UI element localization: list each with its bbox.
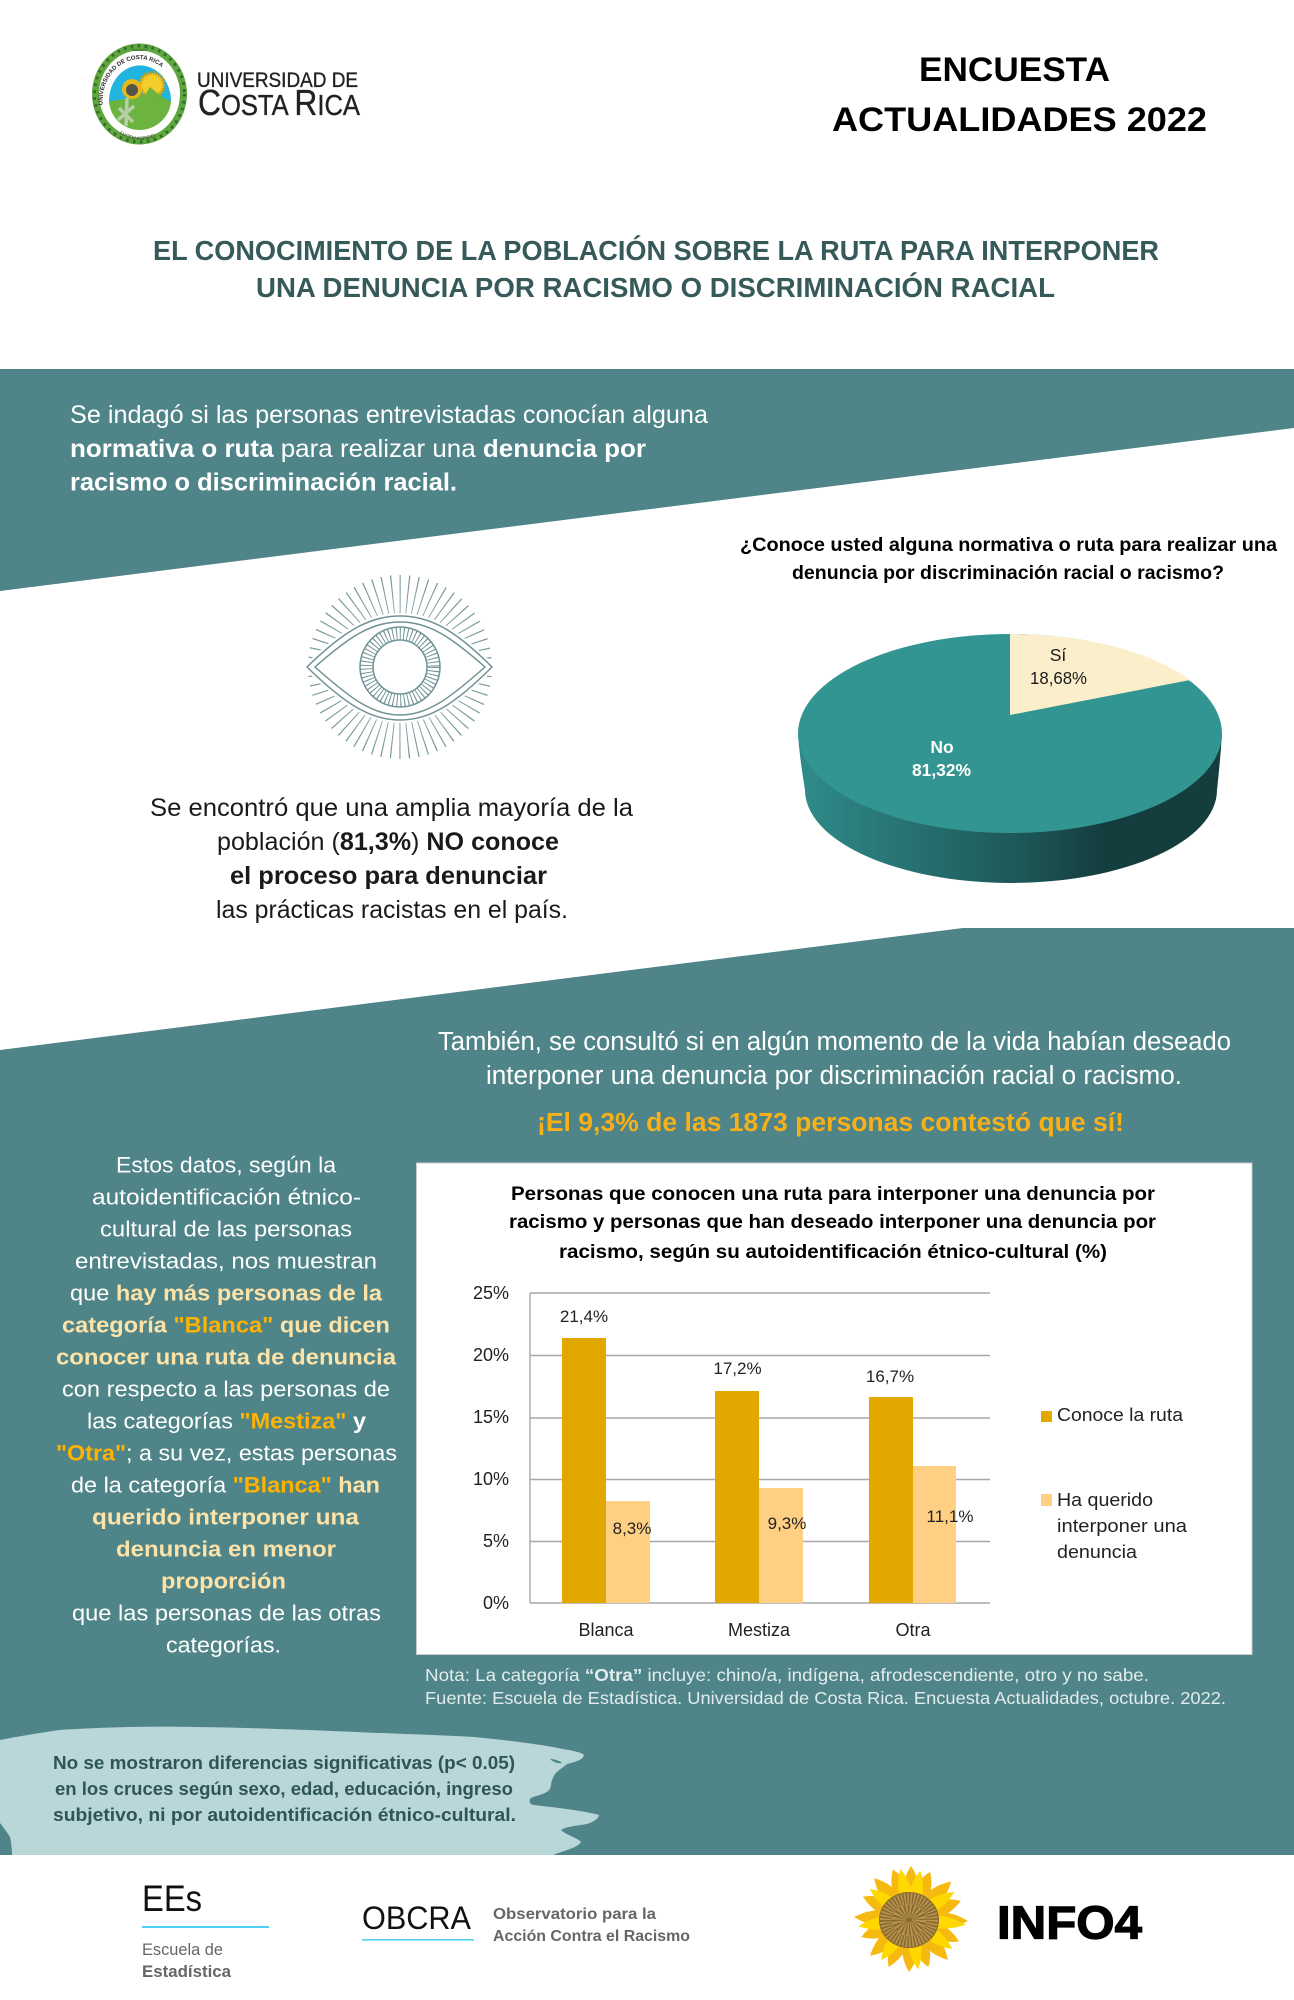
text block: left column explanation: que las personas de las otras [72,1600,381,1626]
text block: survey question intro: Se indagó si las personas entrevistadas conocían alguna [70,401,708,429]
text block: left column explanation: "Otra"; a su vez, estas personas [56,1440,397,1466]
bar chart title: racismo, según su autoidentificación étnico-cultural (%) [559,1241,1107,1263]
slice: Sí [1010,634,1190,715]
bars: Conoce la ruta [562,1338,913,1603]
category labels [578,1620,931,1640]
text block: main finding: Se encontró que una amplia mayoría de la [150,794,633,822]
text block: survey question intro: racismo o discriminación racial. [70,468,457,496]
text block: left column explanation [56,1152,397,1658]
bar chart title [509,1183,1156,1263]
logo: Escuela de Estadística: Estadística [142,1962,232,1981]
y axis labels [473,1283,509,1613]
text block: left column explanation: entrevistadas, nos muestran [75,1248,377,1274]
category labels: Otra [895,1620,931,1640]
y axis labels: 20% [473,1345,509,1365]
title: UNA DENUNCIA POR RACISMO O DISCRIMINACIÓN RACIAL [256,272,1055,303]
data labels: 17,2% [713,1359,762,1378]
logo: Escuela de Estadística [142,1878,269,1981]
text block: left column explanation: con respecto a las personas de [62,1376,390,1402]
survey heading [832,51,1207,139]
label: No: 81,32% [912,760,971,780]
callout text: no significant differences [53,1753,516,1825]
data labels: 9,3% [768,1514,806,1533]
legend [1041,1405,1188,1562]
data labels: 16,7% [866,1367,914,1386]
text block: second question: interponer una denuncia por discriminación racial o racismo. [486,1062,1182,1090]
text block: left column explanation: categorías. [166,1632,281,1658]
callout text: no significant differences: No se mostraron diferencias significativas (p< 0.05) [53,1753,515,1773]
text block: second question: También, se consultó si en algún momento de la vida habían deseado [438,1028,1231,1056]
wordmark: UNIVERSIDAD DE [197,69,358,92]
text block: survey question intro: normativa o ruta para realizar una denuncia por [70,435,646,463]
callout text: no significant differences: subjetivo, ni por autoidentificación étnico-cultural. [53,1805,516,1825]
gridlines [530,1293,990,1603]
text block: note and source: Fuente: Escuela de Estadística. Universidad de Costa Rica. Encuesta Actualidades, octubre. 2022. [425,1688,1226,1708]
legend: interponer una [1057,1516,1188,1536]
panel: lower teal band [0,928,1294,1855]
icon: university seal: LUCEM ASPICIO [120,130,155,140]
y axis labels: 25% [473,1283,509,1303]
label: Sí: 18,68% [1030,668,1087,688]
brush stroke callout shape [0,1727,599,1855]
data labels: 11,1% [927,1507,973,1526]
data labels [560,1307,973,1538]
survey heading: ENCUESTA [919,51,1110,89]
text block: left column explanation: cultural de las personas [100,1216,352,1242]
title [153,235,1159,303]
pie chart title: ¿Conoce usted alguna normativa o ruta para realizar una [740,534,1277,556]
label: Sí [1030,645,1087,688]
text block: left column explanation: proporción [161,1568,286,1594]
text block: left column explanation: autoidentificación étnico- [92,1184,361,1210]
panel: bar chart card [416,1163,1252,1654]
y axis labels: 5% [483,1531,509,1551]
text block: left column explanation: Estos datos, según la [116,1152,336,1178]
text block: main finding [150,794,633,924]
logo: OBCRA: Observatorio para la [493,1906,656,1923]
legend: Ha querido [1057,1490,1153,1510]
label: No [912,737,971,780]
bars: Ha querido interponer una denuncia [606,1466,956,1603]
text block: main finding: las prácticas racistas en el país. [216,896,568,924]
pie chart [798,634,1222,883]
text block: left column explanation: conocer una ruta de denuncia [56,1344,397,1370]
text block: second question [438,1028,1231,1090]
text block: left column explanation: las categorías "Mestiza" y [87,1408,367,1434]
category labels: Blanca [578,1620,635,1640]
logo: Universidad de Costa Rica [92,44,361,144]
data labels: 21,4% [560,1307,608,1326]
logo: Escuela de Estadística: Escuela de [142,1940,223,1959]
text block: left column explanation: querido interponer una [92,1504,360,1530]
y axis labels: 15% [473,1407,509,1427]
pie chart title [740,534,1277,584]
icon: sunflower [854,1866,968,1972]
y axis labels: 10% [473,1469,509,1489]
text block: main finding: población (81,3%) NO conoce [217,828,559,856]
text block: left column explanation: denuncia en menor [116,1536,336,1562]
title: EL CONOCIMIENTO DE LA POBLACIÓN SOBRE LA RUTA PARA INTERPONER [153,235,1159,266]
logo: Escuela de Estadística: EEs [142,1878,202,1919]
text block: left column explanation: categoría "Blanca" que dicen [62,1312,390,1338]
label: Sí: Sí [1050,645,1066,665]
logo: INFO4: INFO4 [997,1896,1142,1948]
callout text: no significant differences: en los cruces según sexo, edad, educación, ingreso [55,1779,513,1799]
icon: university seal [92,44,187,144]
data labels: 8,3% [613,1519,651,1538]
legend: Conoce la ruta [1057,1405,1184,1425]
icon: university seal: UNIVERSIDAD DE COSTA RICA [98,55,163,105]
logo: OBCRA: OBCRA [362,1900,472,1936]
logo: OBCRA: Acción Contra el Racismo [493,1928,690,1945]
wordmark: COSTA RICA [198,82,361,123]
pie chart title: denuncia por discriminación racial o racismo? [792,562,1224,584]
category labels: Mestiza [728,1620,791,1640]
legend: denuncia [1057,1542,1138,1562]
bar chart title: Personas que conocen una ruta para interponer una denuncia por [511,1183,1155,1205]
logo: OBCRA [362,1900,690,1945]
text block: note and source: Nota: La categoría “Otra” incluye: chino/a, indígena, afrodescendiente, otro y no sabe. [425,1665,1149,1685]
text block: survey question intro [70,401,708,496]
text block: note and source [425,1665,1226,1708]
text block: left column explanation: de la categoría "Blanca" han [71,1472,380,1498]
survey heading: ACTUALIDADES 2022 [832,101,1207,139]
panel: top teal band [0,369,1294,591]
label: No: No [930,737,954,757]
y axis labels: 0% [483,1593,509,1613]
text block: main finding: el proceso para denunciar [230,862,547,890]
text block: left column explanation: que hay más personas de la [70,1280,383,1306]
callout: 9,3%: ¡El 9,3% de las 1873 personas contestó que sí! [537,1109,1124,1137]
bar chart title: racismo y personas que han deseado interponer una denuncia por [509,1211,1156,1233]
icon: eye with rays [307,596,492,738]
